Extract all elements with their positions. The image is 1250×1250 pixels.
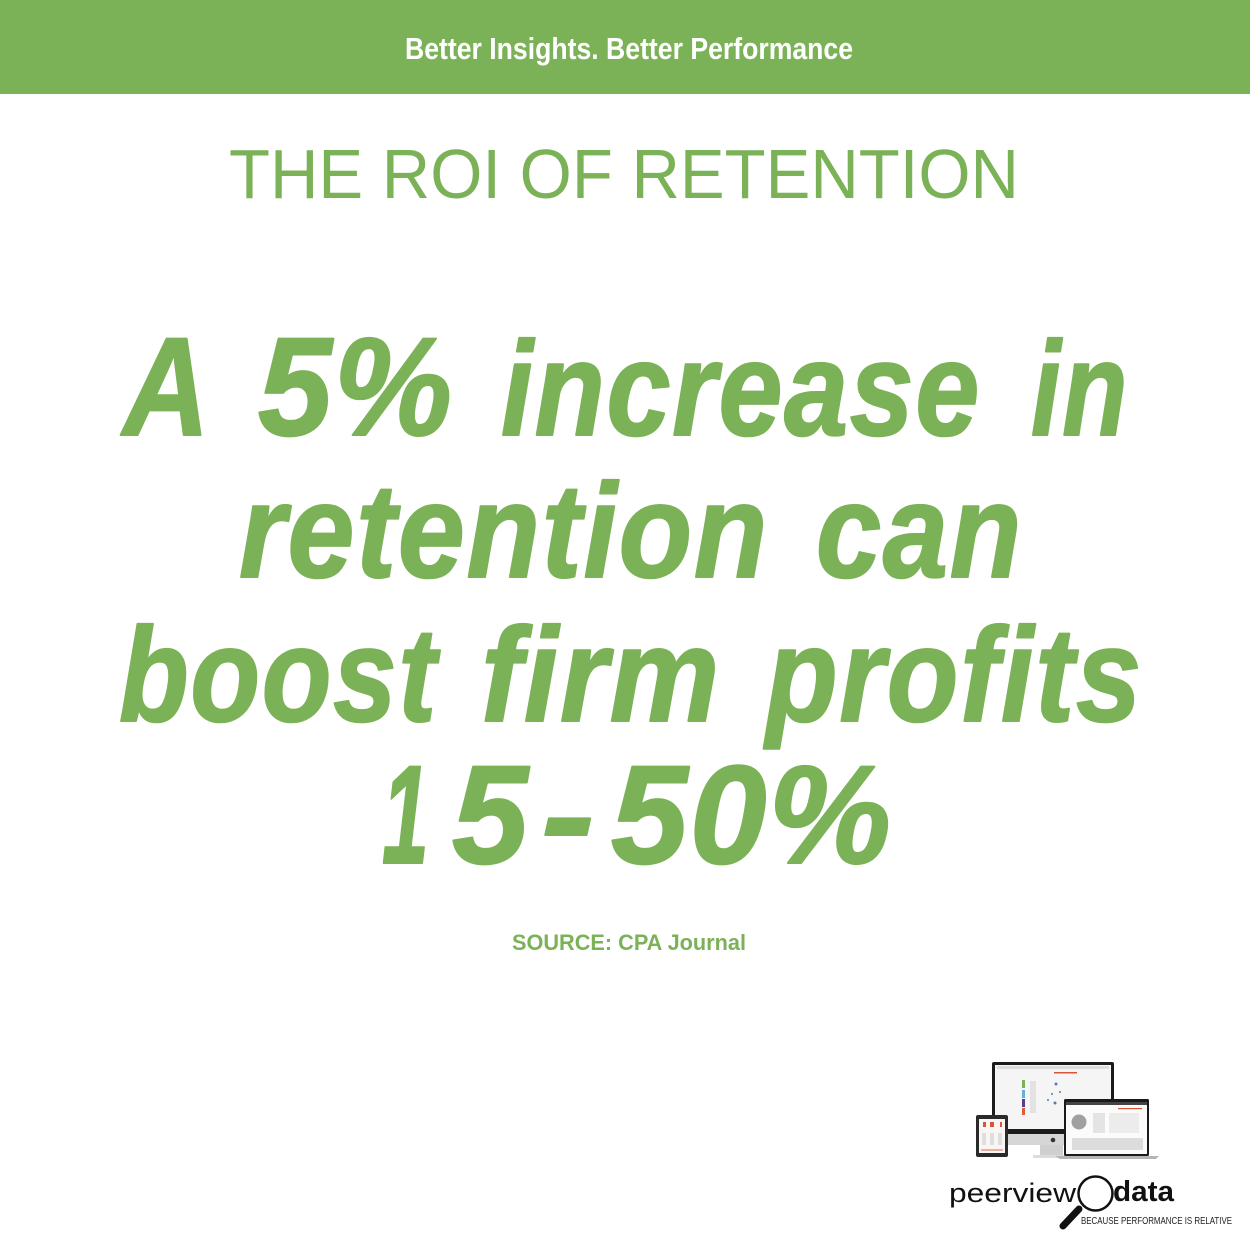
wordmark: peerview — [949, 1178, 1077, 1208]
main statement: retention — [239, 457, 769, 606]
wordmark: data — [1113, 1176, 1175, 1208]
main statement: increase — [501, 315, 981, 464]
main statement: 1 — [382, 736, 430, 893]
source: SOURCE: CPA Journal — [512, 930, 746, 955]
main statement: profits — [763, 601, 1143, 750]
logo — [949, 1062, 1232, 1227]
main statement: 5% — [258, 308, 454, 465]
main statement — [119, 308, 1143, 893]
laptop — [1055, 1099, 1159, 1159]
tagline: Better Insights. Better Performance — [405, 31, 853, 66]
main statement: in — [1031, 315, 1129, 464]
main statement: A — [120, 308, 211, 465]
main statement: firm — [481, 601, 721, 750]
icon: devices — [976, 1062, 1159, 1159]
main statement: 50% — [611, 736, 893, 893]
header banner — [0, 0, 1250, 94]
main statement: - — [541, 736, 597, 893]
title: THE ROI OF RETENTION — [229, 135, 1019, 213]
main statement: can — [816, 457, 1023, 606]
wordmark — [949, 1176, 1175, 1208]
desktop monitor — [992, 1062, 1114, 1158]
icon: magnifying glass — [1063, 1176, 1112, 1226]
main statement: boost — [119, 601, 441, 750]
tablet — [976, 1115, 1008, 1157]
main statement: 5 — [452, 736, 530, 893]
